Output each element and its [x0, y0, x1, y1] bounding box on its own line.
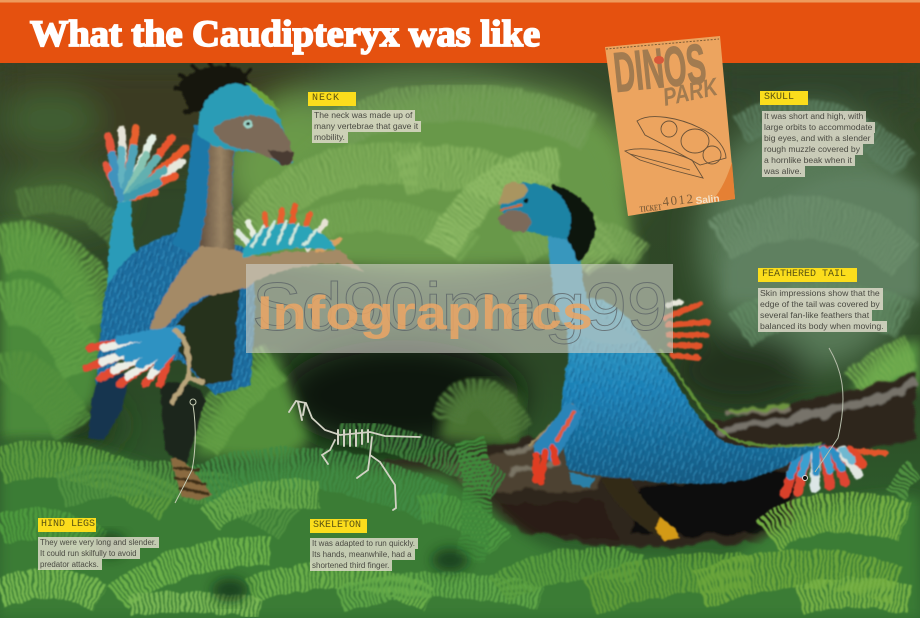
skeleton: Caudipteryx fossil outline	[289, 401, 420, 510]
skull text: a hornlike beak when it	[764, 155, 852, 165]
left dino lower wing fan	[86, 330, 202, 402]
skull text	[762, 111, 875, 177]
ferns: foreground mass	[0, 442, 920, 618]
label: skull	[760, 91, 875, 177]
feathered tail tag	[758, 268, 857, 282]
skull text: big eyes, and with a slender	[764, 133, 871, 143]
title: What the Caudipteryx was like	[30, 14, 540, 55]
ticket number: TICKET	[639, 202, 662, 214]
hind legs text	[38, 537, 159, 570]
left dino body	[95, 228, 255, 395]
feathered tail tag: FEATHERED TAIL	[762, 269, 846, 280]
left dino neck	[172, 125, 236, 262]
left dino chest and arm	[150, 246, 364, 345]
feathered tail text: several fan-like feathers that	[760, 310, 869, 320]
neck text: many vertebrae that gave it	[314, 121, 418, 131]
left dino head and crest	[176, 64, 293, 165]
right dino wing	[530, 405, 575, 482]
hind legs text: They were very long and slender.	[40, 538, 156, 547]
dinosaur left: Caudipteryx standing	[86, 64, 364, 470]
ferns: dark gaps	[94, 533, 468, 602]
skull text: rough muzzle covered by	[764, 144, 860, 154]
callout line: tail pointer	[802, 348, 843, 480]
skull tag: SKULL	[764, 92, 794, 103]
ferns: foreground fronds	[0, 432, 914, 608]
skull tag	[760, 91, 808, 105]
dinosaur right: Caudipteryx facing left	[498, 182, 885, 541]
feathered tail text: balanced its body when moving.	[760, 321, 884, 331]
header bar	[0, 0, 920, 63]
neck text	[312, 110, 421, 143]
left dino foot	[170, 458, 212, 500]
feathered tail text: edge of the tail was covered by	[760, 299, 880, 309]
skeleton tag: SKELETON	[313, 520, 361, 531]
feathered tail text: Skin impressions show that the	[760, 288, 880, 298]
watermark brand text: Infographics	[257, 286, 593, 339]
label: skeleton	[310, 519, 418, 571]
left dino front wing fan	[238, 206, 340, 250]
hind legs text: predator attacks.	[40, 560, 99, 569]
label: hind legs	[38, 518, 159, 570]
neck tag	[308, 92, 356, 106]
fern masses behind fronds	[0, 224, 108, 440]
skull text: It was short and high, with	[764, 111, 863, 121]
left dino tail with feather fan	[106, 128, 186, 290]
ticket skull drawing	[625, 117, 726, 178]
right dino leg	[600, 478, 680, 541]
skeleton text	[310, 538, 418, 571]
skeleton text: It was adapted to run quickly.	[312, 539, 415, 548]
feathered tail text	[758, 288, 887, 332]
right dino neck	[548, 215, 640, 344]
callout line: hind legs pointer	[175, 399, 196, 503]
label: feathered tail	[758, 268, 887, 332]
ticket: Dinos Park: PARK	[660, 73, 722, 112]
skull text: large orbits to accommodate	[764, 122, 872, 132]
ferns: background fronds	[0, 102, 912, 445]
neck text: The neck was made up of	[314, 110, 412, 120]
right dino tail and fan	[785, 448, 885, 494]
watermark outline text: Sd90imag99	[252, 269, 668, 345]
right dino body	[561, 298, 825, 484]
right dino upper tail feathers	[665, 302, 708, 358]
skeleton tag	[310, 519, 367, 533]
hind legs text: It could run skilfully to avoid	[40, 549, 136, 558]
ticket: Dinos Park: 4012	[662, 191, 695, 209]
hind legs tag: HIND LEGS	[41, 519, 95, 530]
right dino head and crest	[498, 182, 596, 262]
log: fallen tree trunk	[345, 374, 916, 548]
ticket logo: DINOS	[611, 32, 709, 104]
neck text: mobility.	[314, 132, 345, 142]
neck tag: NECK	[312, 93, 340, 104]
label: neck	[308, 92, 421, 143]
skull text: was alive.	[764, 166, 802, 176]
skeleton text: Its hands, meanwhile, had a	[312, 550, 412, 559]
ticket: Dinos Park	[605, 32, 735, 216]
ticket brand: Salin	[695, 194, 720, 207]
watermark panel	[246, 264, 673, 353]
skeleton text: shortened third finger.	[312, 561, 389, 570]
